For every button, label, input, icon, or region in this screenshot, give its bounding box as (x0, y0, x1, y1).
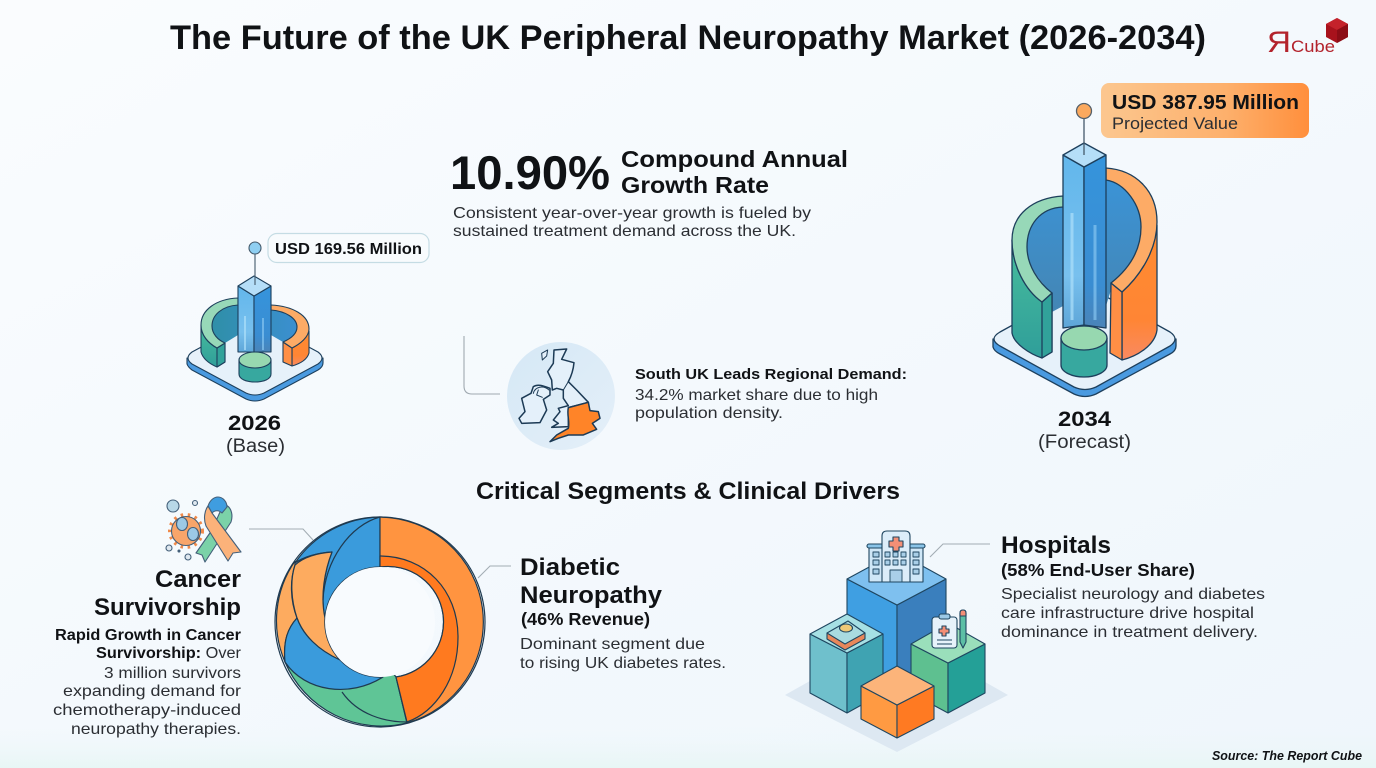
segment: orange main (380, 517, 483, 723)
platform (993, 288, 1176, 396)
callout: 2034 value: USD 387.95 Million (1112, 91, 1299, 114)
donut chart (275, 517, 485, 727)
segment: dark orange crescent (380, 556, 458, 722)
icon: UK map (507, 342, 615, 450)
text: cancer survivorship: 3 million survivors (104, 665, 241, 682)
text: regional demand: 34.2% market share due to high (635, 387, 878, 404)
segment line: green divider (342, 692, 407, 722)
logo: RCube: Cube (1291, 37, 1335, 56)
connector: hospitals (930, 544, 990, 557)
CAGR stat: Growth Rate (621, 172, 769, 198)
CAGR stat: Compound Annual (621, 146, 848, 172)
segment: light orange inner (292, 552, 340, 660)
segment: outer light orange (276, 561, 297, 662)
blue cube (847, 552, 946, 690)
text: cancer survivorship: neuropathy therapies. (71, 721, 241, 738)
CAGR stat: sustained treatment demand across the UK. (453, 223, 796, 240)
logo: RCube: R (1267, 26, 1291, 59)
source note: Source: The Report Cube (1212, 749, 1362, 763)
central column (1063, 143, 1106, 328)
text: diabetic neuropathy: (46% Revenue) (521, 609, 650, 629)
icon: hospital building (867, 531, 925, 582)
text: cancer survivorship (53, 566, 242, 738)
text: cancer survivorship: expanding demand for (63, 683, 242, 700)
hospital cube illustration (785, 531, 1008, 752)
text: hospitals: Specialist neurology and diabetes (1001, 586, 1265, 603)
text: hospitals: Hospitals (1001, 532, 1111, 559)
connector: diabetic (478, 566, 511, 578)
2034 label: 2034 (1058, 408, 1111, 431)
pin (1076, 104, 1092, 155)
2034 label: (Forecast) (1038, 432, 1131, 453)
callout: 2034 value (1101, 83, 1309, 138)
text: regional demand (635, 366, 907, 422)
title: The Future of the UK Peripheral Neuropathy Market (2026-2034) (170, 19, 1206, 57)
text: diabetic neuropathy: Diabetic (520, 554, 620, 581)
text: hospitals (1001, 532, 1265, 641)
2034 tower illustration (993, 104, 1176, 396)
orange cube (861, 666, 934, 738)
teal cube (810, 614, 883, 713)
text: hospitals: (58% End-User Share) (1001, 560, 1195, 580)
icon: pencil (960, 610, 966, 648)
CAGR stat (450, 146, 848, 240)
CAGR stat: Consistent year-over-year growth is fueled by (453, 205, 811, 222)
text: diabetic neuropathy (520, 554, 726, 672)
logo: RCube (1267, 18, 1348, 59)
green arc (1012, 196, 1063, 358)
text: regional demand: population density. (635, 405, 783, 422)
green cube (911, 623, 985, 713)
text: cancer survivorship: Cancer (155, 566, 241, 593)
ribbon (196, 497, 241, 562)
2026 label: (Base) (226, 436, 285, 457)
text: hospitals: dominance in treatment delivery. (1001, 624, 1258, 641)
text: cancer survivorship: Rapid Growth in Cancer (55, 627, 241, 644)
icon: book (827, 621, 865, 650)
text: diabetic neuropathy: Neuropathy (520, 582, 663, 609)
cylinder (1061, 326, 1107, 377)
text: regional demand: South UK Leads Regional Demand: (635, 366, 907, 383)
segment line: blue top inner edge (323, 517, 380, 600)
connector: regional (464, 336, 500, 394)
cell (170, 515, 202, 547)
text: cancer survivorship: Survivorship (94, 594, 241, 621)
callout: 2026 value: USD 169.56 Million (275, 241, 422, 258)
text: cancer survivorship: chemotherapy-induced (53, 702, 241, 719)
shadow (785, 632, 1008, 752)
2034 label (1038, 408, 1131, 453)
text: hospitals: care infrastructure drive hospital (1001, 605, 1254, 622)
text: cancer survivorship: Survivorship: Over (96, 645, 241, 662)
donut hole (325, 567, 435, 677)
icon: clipboard (932, 614, 957, 648)
2026 label: 2026 (228, 412, 281, 435)
text: diabetic neuropathy: Dominant segment due (520, 636, 705, 653)
segment: blue lower (285, 618, 383, 689)
blue interior (1027, 180, 1141, 312)
callout: 2026 value (268, 234, 429, 262)
2026 label (226, 412, 285, 457)
orange arc (1106, 168, 1157, 360)
segment: blue top (295, 517, 380, 618)
section heading: Critical Segments & Clinical Drivers (476, 478, 900, 505)
callout: 2034 value: Projected Value (1112, 115, 1238, 133)
segment: green (285, 650, 407, 726)
CAGR stat: 10.90% (450, 146, 610, 199)
ring outline (275, 517, 485, 727)
icon: cancer cell and ribbon (166, 497, 241, 562)
2026 tower illustration (187, 242, 323, 401)
connector: cancer (249, 529, 313, 540)
text: diabetic neuropathy: to rising UK diabetes rates. (520, 655, 726, 672)
